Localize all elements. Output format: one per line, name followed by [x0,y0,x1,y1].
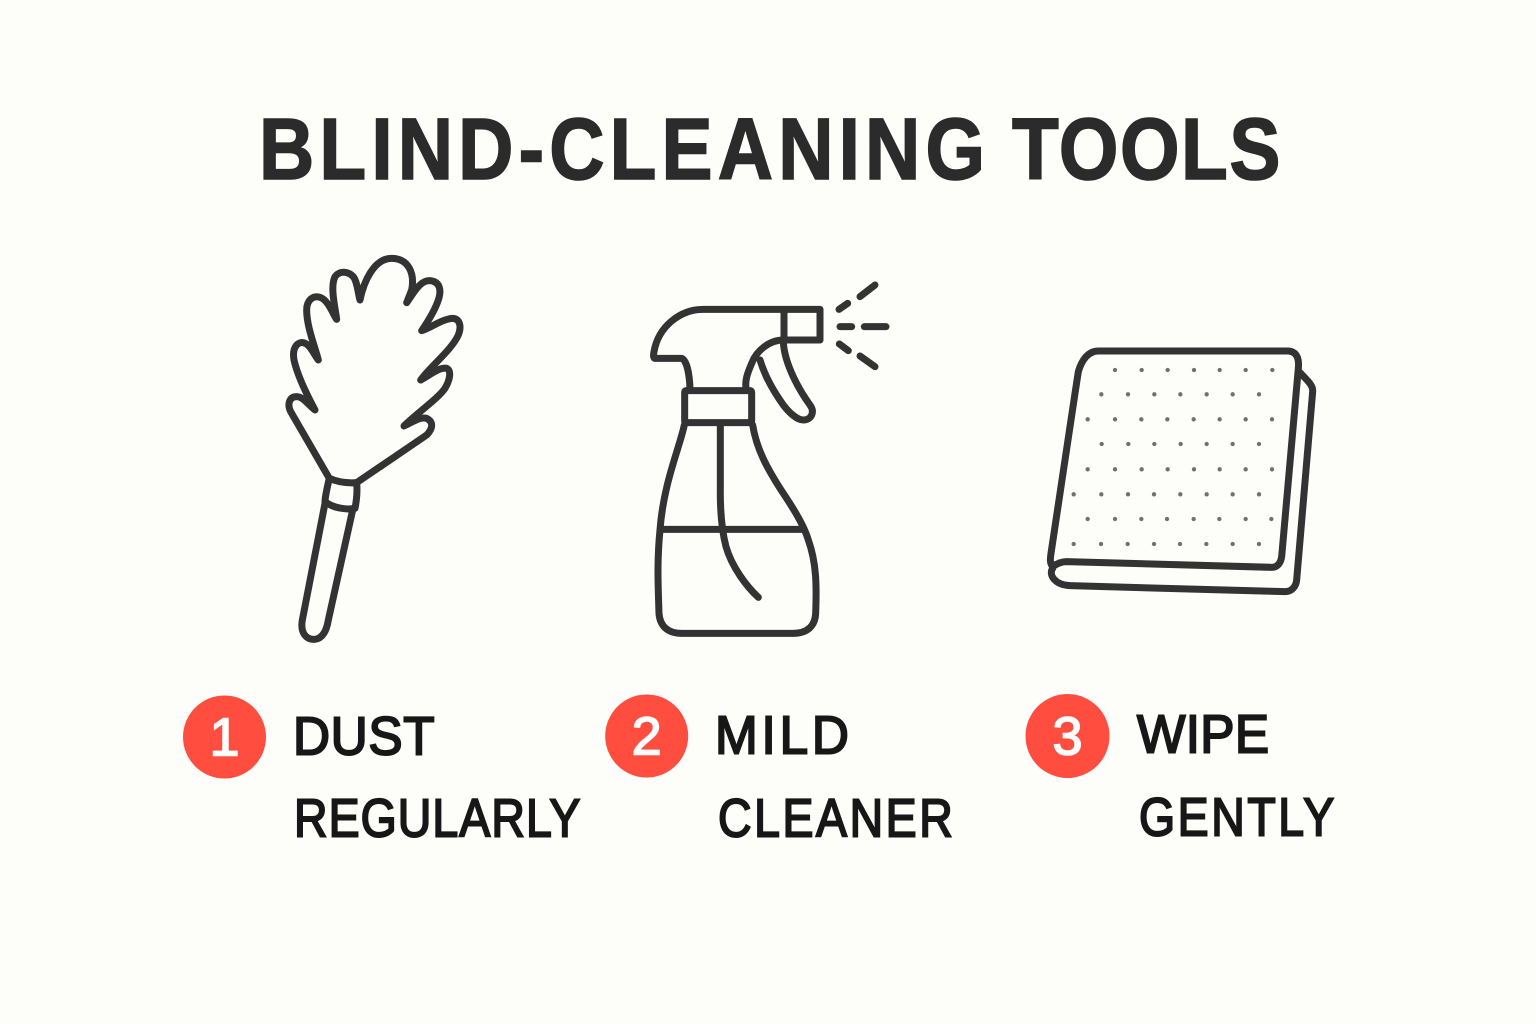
trigger [760,340,812,420]
sprayer head [654,309,820,388]
label: dust regularly [293,706,580,848]
icon: feather duster [289,258,460,639]
duster ferrule [325,478,357,509]
label: dust regularly: DUST [293,706,435,767]
label: mild cleaner: CLEANER [718,787,953,848]
label: mild cleaner [715,705,953,848]
label: wipe gently: GENTLY [1139,786,1334,847]
badge 3: 3 [1052,706,1083,766]
dip tube [720,425,758,597]
badge 2: 2 [632,706,662,766]
label: dust regularly: REGULARLY [294,787,580,848]
label: mild cleaner: MILD [715,705,849,766]
bottle body [658,425,816,633]
cloth outline [1050,351,1313,592]
badge 1: 1 [209,708,240,768]
badge 1 [183,696,266,778]
spray droplets [839,285,886,367]
step 2: mild cleaner [605,694,953,848]
nozzle divider [773,309,794,340]
icon: microfiber cloth [1050,351,1313,592]
icon: spray bottle [654,285,886,633]
label: wipe gently [1137,704,1334,847]
label: wipe gently: WIPE [1137,704,1269,765]
badge 3 [1026,694,1110,778]
title: TOOLS [1012,101,1280,198]
title: BLIND-CLEANING [259,101,985,198]
bottle collar [685,391,752,423]
liquid level line [663,519,803,540]
badge 2 [605,694,688,778]
duster feathers [289,258,460,483]
cloth dots [1071,368,1274,546]
step 3: wipe gently [1026,694,1334,847]
step 1: dust regularly [183,696,580,848]
duster handle [302,503,353,639]
